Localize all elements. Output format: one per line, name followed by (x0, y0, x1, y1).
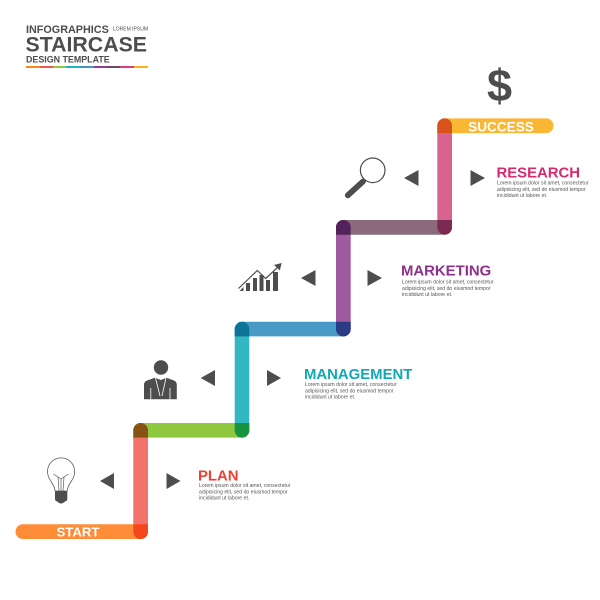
marketing text: incididunt ut labore et. (402, 292, 452, 298)
icon: growth chart (238, 263, 282, 291)
research text (496, 165, 589, 199)
icon: businessman (144, 360, 177, 399)
marketing text (401, 264, 494, 298)
marketing text: Lorem ipsum dolor sit amet, consectetur (402, 280, 494, 286)
plan text: incididunt ut labore et. (199, 496, 249, 502)
plan riser (133, 423, 148, 539)
title block: INFOGRAPHICS (26, 24, 109, 36)
title block: DESIGN TEMPLATE (26, 54, 110, 64)
arrows plan (100, 473, 180, 489)
icon: magnifying glass (348, 158, 385, 195)
arrows management (201, 370, 281, 386)
research text: incididunt ut labore et. (497, 193, 547, 199)
arrows marketing (301, 270, 382, 286)
management text (304, 367, 412, 400)
title block: STAIRCASE (26, 32, 147, 56)
joint overlaps (133, 118, 452, 539)
title block (26, 24, 148, 68)
title block: LOREM IPSUM (113, 26, 148, 32)
success label: SUCCESS (468, 119, 534, 134)
start label: START (57, 524, 99, 539)
management text: incididunt ut labore et. (305, 394, 355, 400)
marketing riser (336, 220, 351, 336)
success bar (437, 118, 554, 133)
plan text: adipisicing elit, sed do eiusmod tempor (199, 489, 288, 495)
marketing text: adipisicing elit, sed do eiusmod tempor (402, 286, 491, 292)
research text: Lorem ipsum dolor sit amet, consectetur (497, 180, 589, 186)
management tread (235, 322, 351, 336)
arrows research (404, 170, 485, 186)
marketing text: MARKETING (401, 264, 491, 280)
research riser (437, 118, 452, 235)
research text: adipisicing elit, sed do eiusmod tempor (497, 187, 586, 193)
management riser (235, 322, 249, 438)
research text: RESEARCH (496, 165, 580, 181)
start bar (16, 524, 148, 539)
plan text (198, 469, 291, 502)
management text: adipisicing elit, sed do eiusmod tempor (305, 388, 394, 394)
marketing tread (336, 220, 452, 235)
icon: dollar sign: $ (487, 60, 512, 111)
management text: Lorem ipsum dolor sit amet, consectetur (305, 382, 397, 388)
plan text: Lorem ipsum dolor sit amet, consectetur (199, 483, 291, 489)
staircase (16, 118, 554, 539)
icon: light bulb (48, 458, 75, 504)
management text: MANAGEMENT (304, 367, 412, 383)
plan tread (133, 423, 249, 438)
plan text: PLAN (198, 469, 239, 485)
